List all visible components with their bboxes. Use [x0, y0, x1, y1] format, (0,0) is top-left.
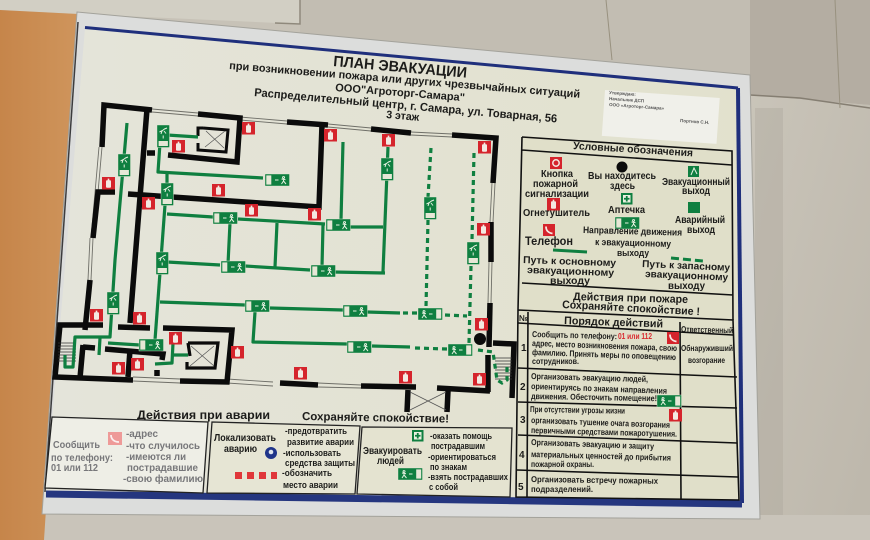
stairs — [58, 343, 512, 379]
panel: localize accident — [207, 422, 360, 494]
evacuation exit legend item — [662, 166, 730, 197]
accident actions headings: Действия при аварии — [137, 410, 270, 422]
panel: evacuate people: по знакам — [430, 462, 467, 473]
panel: localize accident: -использовать — [283, 448, 341, 459]
row 4: Организовать эвакуацию и защиту — [531, 437, 654, 451]
evacuation exit legend item: Эвакуационный — [662, 177, 730, 188]
emergency exit legend item: выход — [687, 225, 716, 236]
panel: evacuate people: с собой — [429, 482, 458, 493]
panel: localize accident: -предотвратить — [285, 426, 347, 437]
fire actions heading: Действия при пожаре — [573, 291, 688, 306]
row 2: ориентируясь по знакам направления — [531, 381, 667, 396]
action table grid — [516, 310, 739, 500]
panel: localize accident: развитие аварии — [287, 437, 354, 448]
alarm button legend item: сигнализации — [525, 189, 589, 200]
panel: evacuate people: людей — [377, 456, 404, 467]
title block — [229, 53, 581, 125]
title block: ООО"Агроторг-Самара" — [335, 82, 465, 104]
panel: call by phone — [45, 417, 208, 493]
row 3 — [520, 404, 682, 439]
panel: evacuate people: -ориентироваться — [428, 452, 496, 463]
first aid legend item: Аптечка — [608, 204, 645, 216]
reserve route legend item: эвакуационному — [645, 269, 729, 284]
row 1: 01 или 112 — [618, 331, 652, 341]
panel: evacuate people — [357, 427, 512, 497]
direction legend item: Направление движения — [583, 225, 682, 239]
row 1: Обнаруживший — [681, 343, 733, 353]
panel: call by phone: пострадавшие — [127, 462, 198, 474]
row 2: Организовать эвакуацию людей, — [531, 371, 648, 384]
panel: call by phone: -что случилось — [126, 440, 200, 452]
alarm button legend item: пожарной — [533, 179, 578, 190]
row 5: 5 — [518, 482, 524, 493]
fire actions panel — [516, 291, 739, 500]
legend panel — [516, 137, 737, 500]
you are here legend item — [588, 162, 656, 192]
legend background — [516, 137, 737, 500]
row 3: При отсутствии угрозы жизни — [530, 404, 625, 416]
main route legend item — [523, 250, 617, 287]
panel: localize accident: аварию — [224, 444, 257, 455]
approval stamp: Портнов С.Н. — [680, 118, 710, 125]
main route legend item: Путь к основному — [523, 255, 617, 269]
row 4: материальных ценностей до прибытия — [531, 449, 671, 463]
row 1 — [521, 329, 733, 366]
exit direction signs — [107, 125, 480, 356]
accident actions headings: Сохраняйте спокойствие! — [302, 411, 449, 426]
main evacuation routes — [65, 123, 410, 367]
evacuation exit legend item: выход — [682, 186, 711, 197]
title block: Распределительный центр, г. Самара, ул. Товарная, 56 — [254, 87, 558, 125]
accident actions headings — [137, 410, 449, 426]
panel: call by phone: -свою фамилию — [123, 473, 203, 485]
row 4: пожарной охраны. — [531, 459, 594, 469]
panel: evacuate people: пострадавшим — [431, 441, 485, 452]
alarm button legend item — [525, 157, 589, 200]
extinguisher legend item — [523, 198, 590, 219]
panel: call by phone: -имеются ли — [126, 451, 186, 463]
panel: call by phone: по телефону: — [51, 452, 113, 464]
panel: evacuate people: -оказать помощь — [430, 431, 492, 442]
blue border — [45, 22, 742, 504]
panel: localize accident: средства защиты — [285, 458, 355, 469]
wooden door frame — [0, 10, 78, 540]
emergency exit legend item: Аварийный — [675, 215, 725, 226]
reserve evacuation routes — [403, 148, 507, 383]
title block: ПЛАН ЭВАКУАЦИИ — [333, 53, 468, 82]
you are here marker — [474, 333, 486, 345]
row 2 — [520, 371, 682, 407]
phone legend item: Телефон — [525, 236, 573, 248]
row 5 — [518, 474, 658, 494]
panel: call by phone: 01 или 112 — [51, 462, 98, 474]
row 3: первичными средствами пожаротушения. — [531, 425, 677, 439]
title block: 3 этаж — [386, 109, 420, 124]
reserve route legend item — [642, 258, 731, 292]
row 1: адрес, место возникновения пожара, свою — [532, 338, 677, 353]
panel: evacuate people: -взять пострадавших — [428, 472, 509, 483]
building walls — [55, 105, 514, 412]
row 2: 2 — [520, 382, 526, 393]
row 1: фамилию. Принять меры по оповещению — [532, 347, 676, 362]
approval stamp — [602, 90, 720, 144]
floor plan — [55, 105, 514, 412]
table header: № — [519, 313, 528, 323]
direction legend item: к эвакуационному — [595, 237, 672, 250]
reserve route legend item: выходу — [668, 281, 705, 292]
board surface — [46, 28, 742, 503]
reserve route legend item: Путь к запасному — [642, 259, 731, 274]
window double lines — [88, 109, 495, 388]
main route legend item: эвакуационному — [527, 265, 615, 279]
panel: localize accident: место аварии — [283, 480, 338, 491]
legend frame — [518, 137, 733, 320]
evacuation plan board — [42, 12, 760, 519]
row 3: организовать тушение очага возгорания — [531, 415, 670, 430]
row 5: Организовать встречу пожарных — [531, 474, 658, 486]
row 1: 1 — [521, 343, 527, 354]
you are here legend item: здесь — [610, 181, 635, 192]
phone legend item — [525, 224, 573, 248]
table header: Ответственный — [681, 324, 733, 335]
title block: при возникновении пожара или других чрезвычайных ситуаций — [229, 60, 581, 101]
row 1: возгорание — [688, 355, 725, 365]
panel: call by phone: Сообщить — [53, 439, 100, 451]
first aid legend item — [608, 193, 645, 216]
fire actions heading: Сохраняйте спокойствие ! — [562, 299, 700, 318]
row 3: 3 — [520, 415, 526, 426]
approval stamp: Начальник ДСП — [609, 96, 644, 103]
row 4 — [519, 437, 671, 469]
approval stamp: Утверждаю: — [609, 90, 637, 97]
fire actions heading — [562, 291, 700, 318]
you are here legend item: Вы находитесь — [588, 171, 656, 182]
lift shafts — [187, 128, 446, 410]
main route legend item: выходу — [550, 276, 590, 287]
panel: localize accident: Локализовать — [214, 433, 276, 444]
direction legend item — [583, 217, 682, 259]
row 5: подразделений. — [531, 484, 593, 494]
row 2: движения. Обесточить помещение! — [531, 391, 657, 403]
approval stamp: ООО «Агроторг-Самара» — [609, 102, 665, 111]
table header: Порядок действий — [564, 315, 663, 330]
panel: localize accident: -обозначить — [282, 468, 332, 479]
table header — [519, 313, 733, 335]
row 1: Сообщить по телефону: — [532, 329, 617, 341]
panel: evacuate people: Эвакуировать — [363, 446, 422, 457]
fire extinguishers — [90, 122, 491, 386]
emergency exit legend item — [675, 202, 725, 236]
row 4: 4 — [519, 450, 525, 461]
legend title: Условные обозначения — [573, 140, 693, 159]
board frame — [42, 12, 760, 519]
direction legend item: выходу — [617, 248, 650, 259]
alarm button legend item: Кнопка — [541, 169, 573, 180]
panel: call by phone: -адрес — [126, 428, 158, 440]
extinguisher legend item: Огнетушитель — [523, 207, 590, 219]
row 1: сотрудников. — [532, 356, 579, 366]
